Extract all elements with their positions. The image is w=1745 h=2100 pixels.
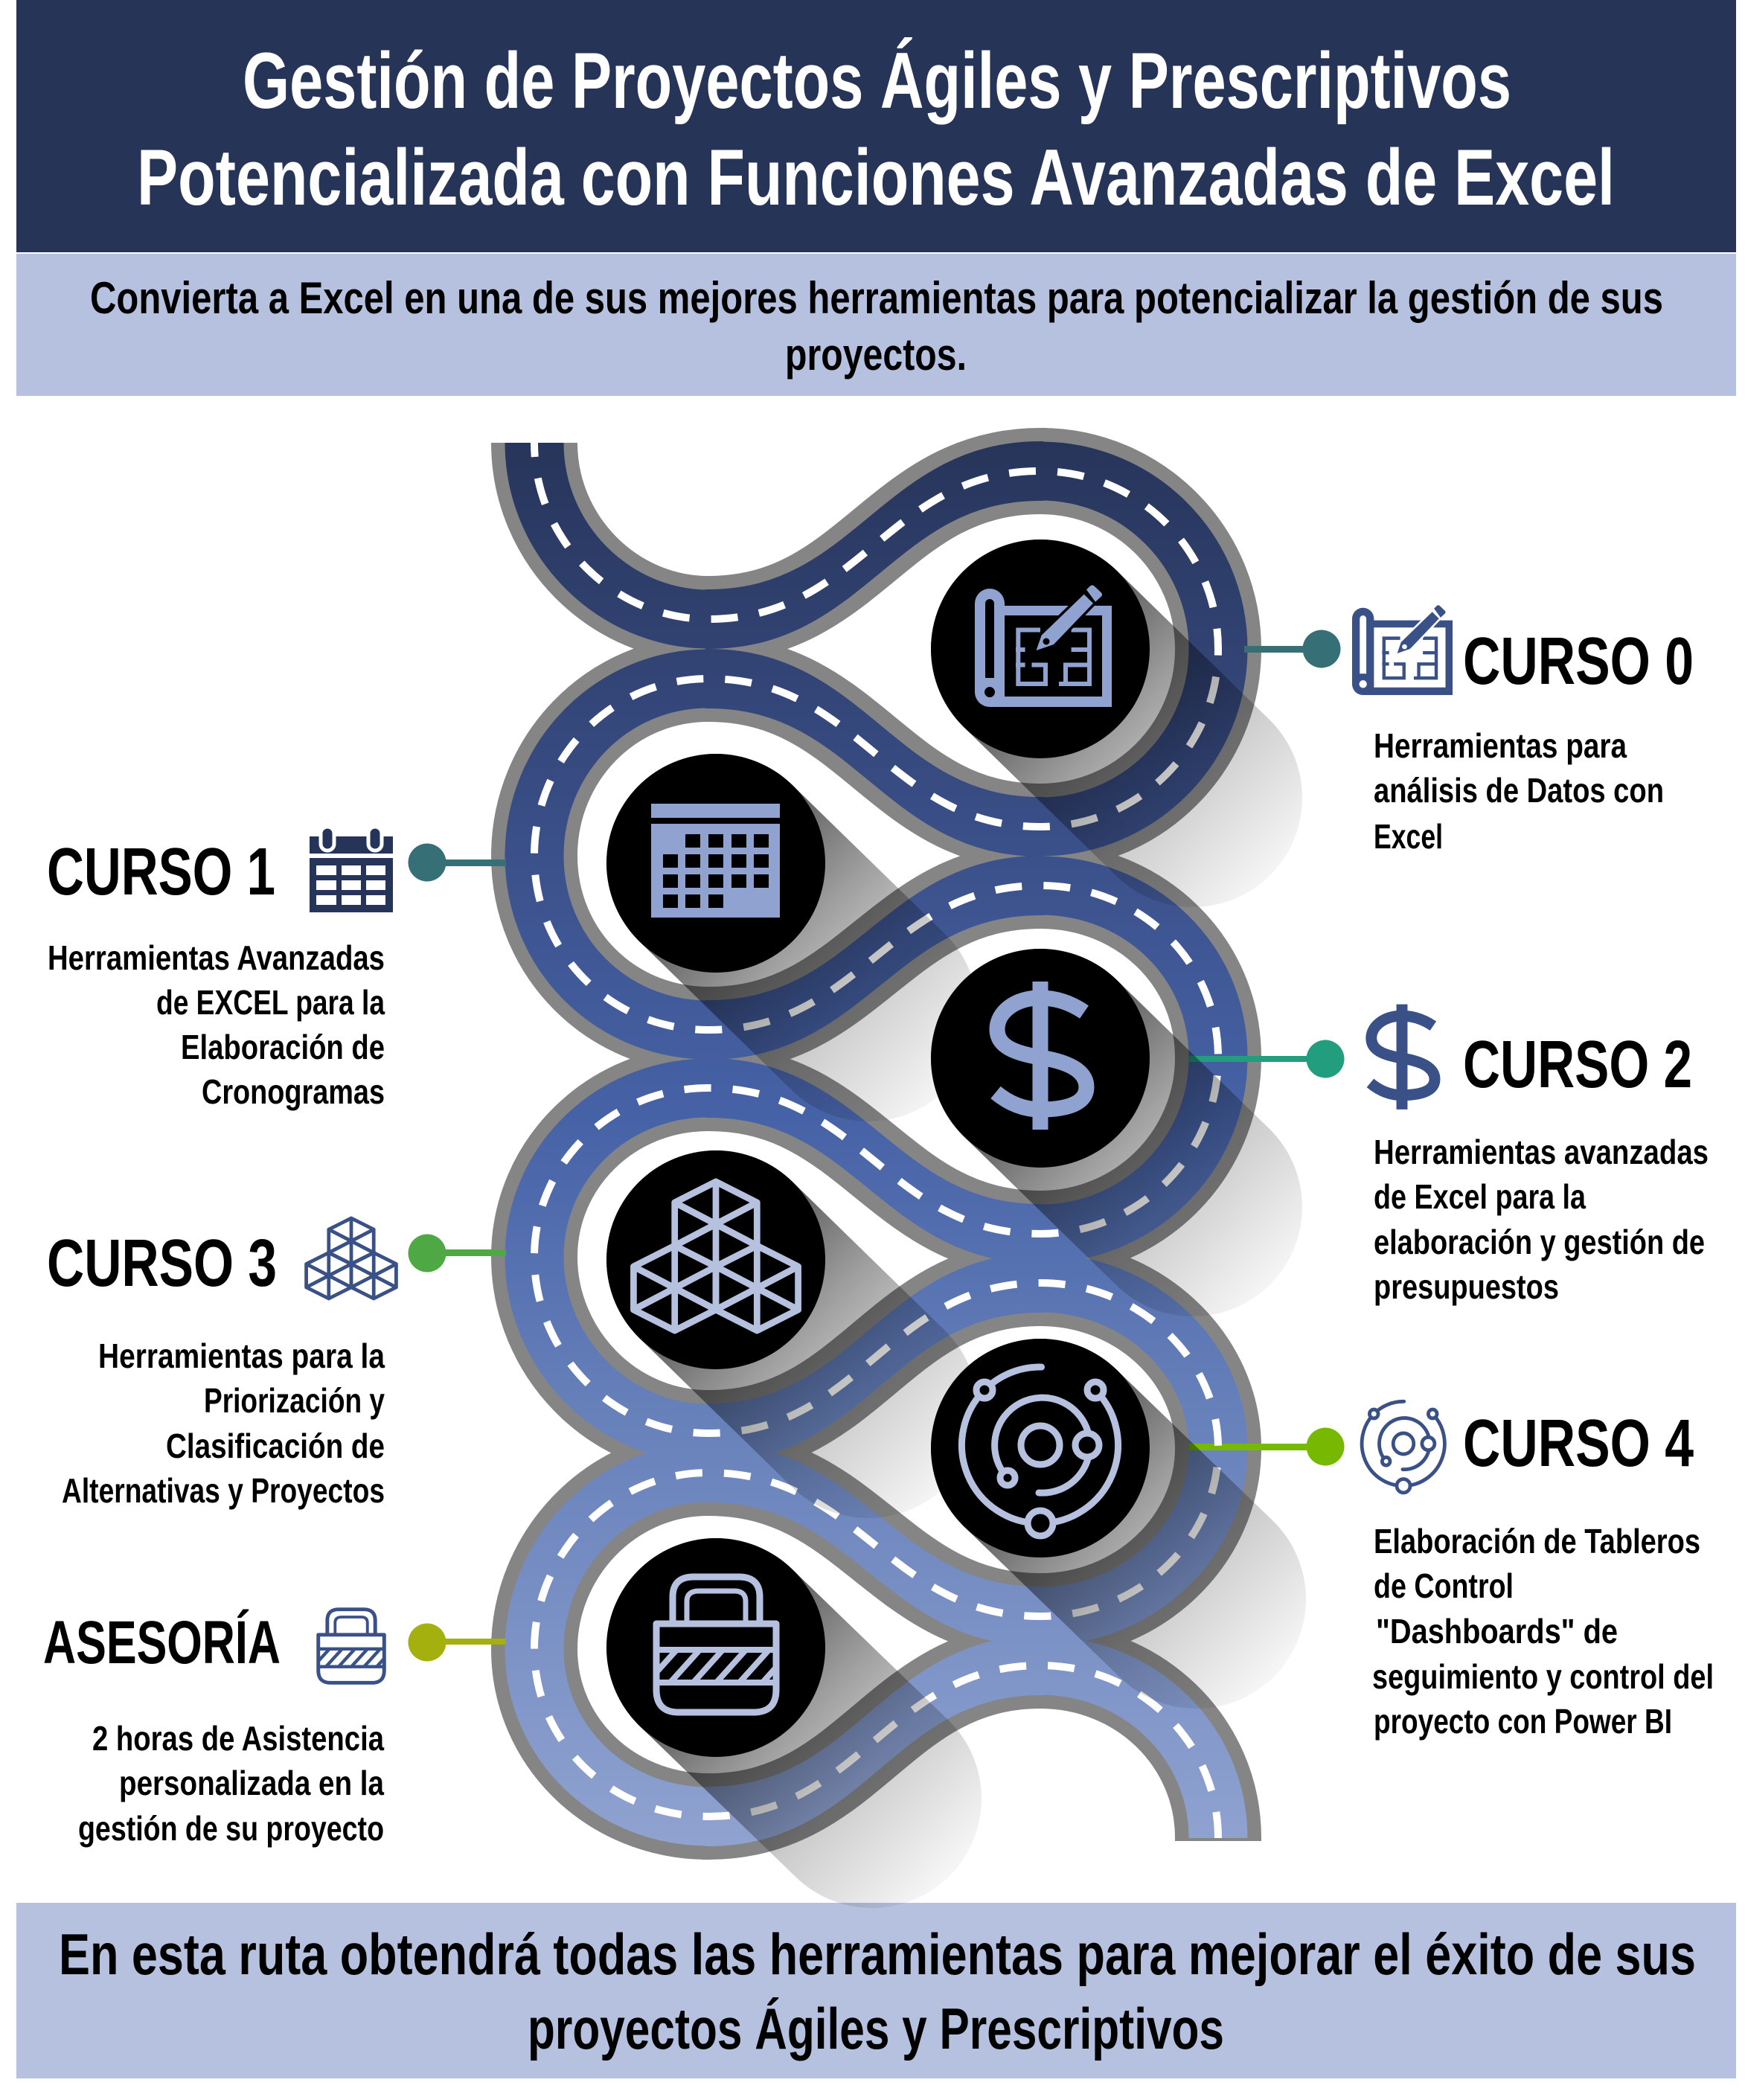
header band [16, 0, 1736, 252]
description: asesoria [78, 1719, 384, 1848]
connector: curso 1 [408, 844, 506, 881]
connector: asesoria [408, 1624, 506, 1661]
connector: curso 0 [1244, 630, 1341, 668]
heading: curso 1: CURSO 1 [47, 835, 275, 909]
icon: orbit [961, 1367, 1118, 1536]
node: dollar [931, 949, 1150, 1168]
description: curso 4: proyecto con Power BI [1374, 1702, 1672, 1741]
icon: dollar [996, 982, 1086, 1130]
description: curso 3: Herramientas para la [98, 1336, 385, 1375]
small icon: blueprint [1352, 605, 1453, 695]
description: curso 1: Elaboración de [181, 1028, 385, 1066]
description: curso 1: de EXCEL para la [156, 983, 385, 1022]
description: curso 3: Priorización y [204, 1381, 385, 1420]
heading: asesoria: ASESORÍA [43, 1609, 281, 1677]
road centre dashes [534, 443, 1218, 1838]
small icon: hexagons [307, 1218, 396, 1299]
subtitle: proyectos. [785, 330, 967, 380]
description: curso 2: de Excel para la [1374, 1177, 1586, 1216]
icon: lock [645, 1577, 794, 1712]
description: curso 3: Alternativas y Proyectos [62, 1471, 385, 1510]
icon: hexagons [633, 1182, 798, 1331]
description: curso 0 [1374, 726, 1664, 856]
description: curso 0: Herramientas para [1374, 726, 1627, 765]
node: lock [606, 1538, 825, 1757]
small icon: calendar [310, 827, 393, 912]
subtitle band [16, 254, 1736, 396]
small icon: lock [313, 1610, 394, 1683]
panel: curso 0 [1352, 605, 1694, 856]
connector: curso 4 [1189, 1427, 1344, 1466]
panel: curso 4 [1362, 1401, 1714, 1741]
description: curso 2: presupuestos [1374, 1267, 1559, 1306]
heading: curso 3: CURSO 3 [47, 1226, 277, 1301]
node: orbit [931, 1339, 1150, 1558]
small icon: orbit [1362, 1401, 1444, 1493]
node: blueprint [931, 540, 1150, 758]
description: curso 4 [1372, 1522, 1714, 1741]
description: curso 1: Herramientas Avanzadas [48, 938, 385, 977]
subtitle [90, 273, 1663, 380]
description: curso 3: Clasificación de [166, 1427, 385, 1465]
icon: blueprint [975, 585, 1112, 707]
description: curso 1 [48, 938, 385, 1111]
panel: asesoria [43, 1609, 394, 1848]
node: hexagons [606, 1150, 825, 1369]
description: curso 4: de Control [1374, 1566, 1514, 1605]
closing message [59, 1921, 1696, 2061]
description: curso 0: Excel [1374, 817, 1443, 856]
title [137, 36, 1615, 222]
icon: calendar [651, 804, 780, 918]
description: curso 3 [62, 1336, 385, 1510]
closing band [16, 1903, 1736, 2078]
description: curso 1: Cronogramas [202, 1072, 385, 1111]
panel: curso 1 [47, 827, 393, 1111]
panel: curso 2 [1370, 1005, 1709, 1306]
long shadows [716, 649, 1197, 1799]
connector: curso 2 [1189, 1040, 1344, 1078]
description: curso 4: "Dashboards" de [1376, 1612, 1618, 1651]
description: asesoria: 2 horas de Asistencia [92, 1719, 384, 1758]
small icon: dollar [1370, 1005, 1435, 1110]
description: curso 2 [1374, 1133, 1709, 1306]
description: asesoria: gestión de su proyecto [78, 1809, 384, 1848]
description: asesoria: personalizada en la [119, 1764, 384, 1802]
panel: curso 3 [47, 1218, 396, 1510]
node: calendar [606, 754, 825, 973]
closing message: proyectos Ágiles y Prescriptivos [528, 1996, 1224, 2061]
connector: curso 3 [408, 1234, 506, 1273]
description: curso 0: análisis de Datos con [1374, 771, 1664, 810]
winding road [534, 443, 1261, 1841]
